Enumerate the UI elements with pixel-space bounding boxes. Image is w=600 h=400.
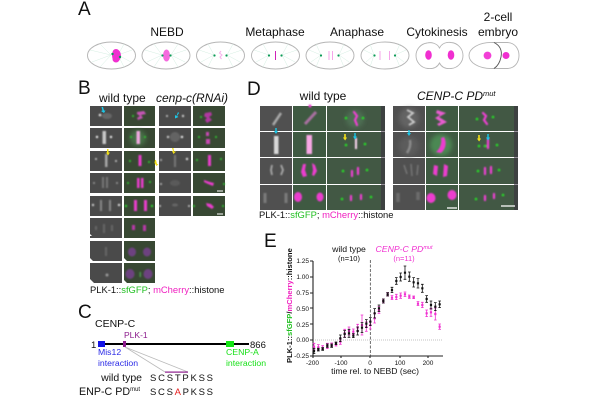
zero reference line xyxy=(313,339,443,341)
panel letter D: D xyxy=(247,79,261,100)
PLK-1 label: PLK-1 xyxy=(124,330,148,340)
Mis12 interaction label: Mis12 xyxy=(98,347,121,357)
heading: wild type: wild type xyxy=(299,89,347,103)
wild type sequence label: wild type xyxy=(100,372,142,384)
label: Metaphase: Metaphase xyxy=(245,25,305,39)
x axis title: time rel. to NEBD (sec) xyxy=(331,366,419,376)
motif bar xyxy=(165,372,188,373)
heading: cenp-c(RNAi): cenp-c(RNAi) xyxy=(156,91,228,105)
arrow: cyan, cenp-c xyxy=(175,112,179,118)
y axis tick labels: 1.25 xyxy=(296,258,309,265)
embryo 8: 2-cell xyxy=(469,42,519,69)
x axis tick labels: -100 xyxy=(334,360,348,367)
y axis tick labels: 1.00 xyxy=(296,274,309,281)
panel A: cell cycle schematics xyxy=(78,0,519,69)
caption B: PLK-1::sfGFP; mCherry::histone xyxy=(90,284,224,295)
y axis title: PLK-1::sfGFP/mCherry::histone xyxy=(285,248,294,363)
mutant sequence label: mut xyxy=(130,387,140,393)
heading: CENP-C PD mut: mut xyxy=(483,89,496,98)
label: NEBD: NEBD xyxy=(150,25,184,39)
arrow: cyan, gray WT xyxy=(274,128,278,134)
arrow: yellow, merged mutant xyxy=(477,135,481,142)
embryo 1: prophase xyxy=(88,42,136,69)
heading: CENP-C PD mut: CENP-C PD xyxy=(417,89,483,103)
Mis12 domain xyxy=(98,341,105,347)
x axis tick labels: 0 xyxy=(368,360,372,367)
embryo 4: metaphase xyxy=(252,42,300,69)
mutant sequence: SCSAPKSS xyxy=(150,387,213,398)
series label: wild type: wild type xyxy=(331,244,366,254)
y axis tick labels: 0.25 xyxy=(296,322,309,329)
residue 866 label: 866 xyxy=(250,340,266,351)
grayscale signal xyxy=(92,113,190,276)
x axis tick labels: -200 xyxy=(306,360,319,367)
x axis tick labels xyxy=(306,360,434,367)
wild type sequence: SCSTPKSS xyxy=(150,373,213,384)
arrow: yellow, wild type xyxy=(106,149,110,156)
arrow: cyan, gray mutant xyxy=(407,130,411,136)
scale bars xyxy=(217,191,223,214)
data series: mutant xyxy=(313,292,441,350)
green and magenta signal xyxy=(125,111,225,279)
arrow: yellow, merged WT xyxy=(343,134,347,140)
CENP-A domain xyxy=(226,341,234,347)
arrow: yellow, between columns xyxy=(154,160,158,166)
arrow: yellow, cenp-c xyxy=(172,148,176,154)
embryo 6: late anaphase xyxy=(361,42,409,69)
series label: mutant: mut xyxy=(423,245,433,251)
scale bars xyxy=(447,206,515,208)
y axis tick labels: 0.00 xyxy=(296,337,309,344)
magenta signal, middle columns xyxy=(294,104,456,203)
panel E: PLK-1 levels chart xyxy=(264,231,443,376)
label: 2-cell embryo: embryo xyxy=(478,25,518,39)
label: 2-cell embryo: 2-cell xyxy=(484,10,512,24)
label: Cytokinesis: Cytokinesis xyxy=(406,25,468,39)
label: Anaphase: Anaphase xyxy=(330,25,384,39)
panel C: CENP-C domain map xyxy=(78,302,266,398)
embryo 7: cytokinesis xyxy=(416,42,463,69)
zoom lines xyxy=(125,347,188,372)
Mis12 interaction label: interaction xyxy=(98,358,138,368)
y axis tick labels: 0.75 xyxy=(296,290,309,297)
data series: wild type xyxy=(313,266,441,354)
tile backgrounds xyxy=(260,106,518,210)
y axis tick labels xyxy=(294,258,309,360)
NEBD reference line xyxy=(369,260,371,356)
embryo 2: NEBD xyxy=(142,42,190,69)
y axis tick labels: -0.25 xyxy=(294,353,309,360)
arrow: cyan, merged WT xyxy=(353,133,357,140)
green and magenta signal, merged columns xyxy=(342,112,503,200)
panel letter C: C xyxy=(78,302,92,323)
n label wild type: (n=10) xyxy=(338,254,360,263)
x axis tick labels: 100 xyxy=(395,360,406,367)
CENP-A interaction label: interaction xyxy=(226,358,266,368)
arrow: cyan, merged mutant xyxy=(486,134,490,140)
series label: mutant: CENP-C PD xyxy=(376,244,423,254)
residue 1 label: 1 xyxy=(91,340,96,351)
CENP-A interaction label: CENP-A xyxy=(226,347,259,357)
n label mutant: (n=11) xyxy=(393,254,415,263)
y axis tick labels: 0.50 xyxy=(296,306,309,313)
embryo 3: prometaphase xyxy=(196,42,244,69)
arrow: cyan, wild type xyxy=(101,107,106,113)
panel letter B: B xyxy=(78,78,91,99)
grayscale and green tile backgrounds xyxy=(90,106,225,283)
caption D: PLK-1::sfGFP; mCherry::histone xyxy=(259,209,393,220)
axes xyxy=(310,261,443,358)
protein backbone xyxy=(98,343,249,345)
mutant sequence label: ENP-C PD xyxy=(79,386,130,398)
embryo 5: early anaphase xyxy=(306,42,354,69)
protein name: CENP-C xyxy=(95,318,136,330)
heading: wild type: wild type xyxy=(98,91,146,105)
PLK-1 site xyxy=(123,341,126,347)
panel D: wild type and CENP-C PD mutant micrographs xyxy=(247,79,518,220)
panel letter E: E xyxy=(264,231,277,252)
x axis tick labels: 200 xyxy=(423,360,434,367)
panel B: wild type and cenp-c RNAi micrographs xyxy=(78,78,228,295)
grayscale signal xyxy=(265,110,418,203)
